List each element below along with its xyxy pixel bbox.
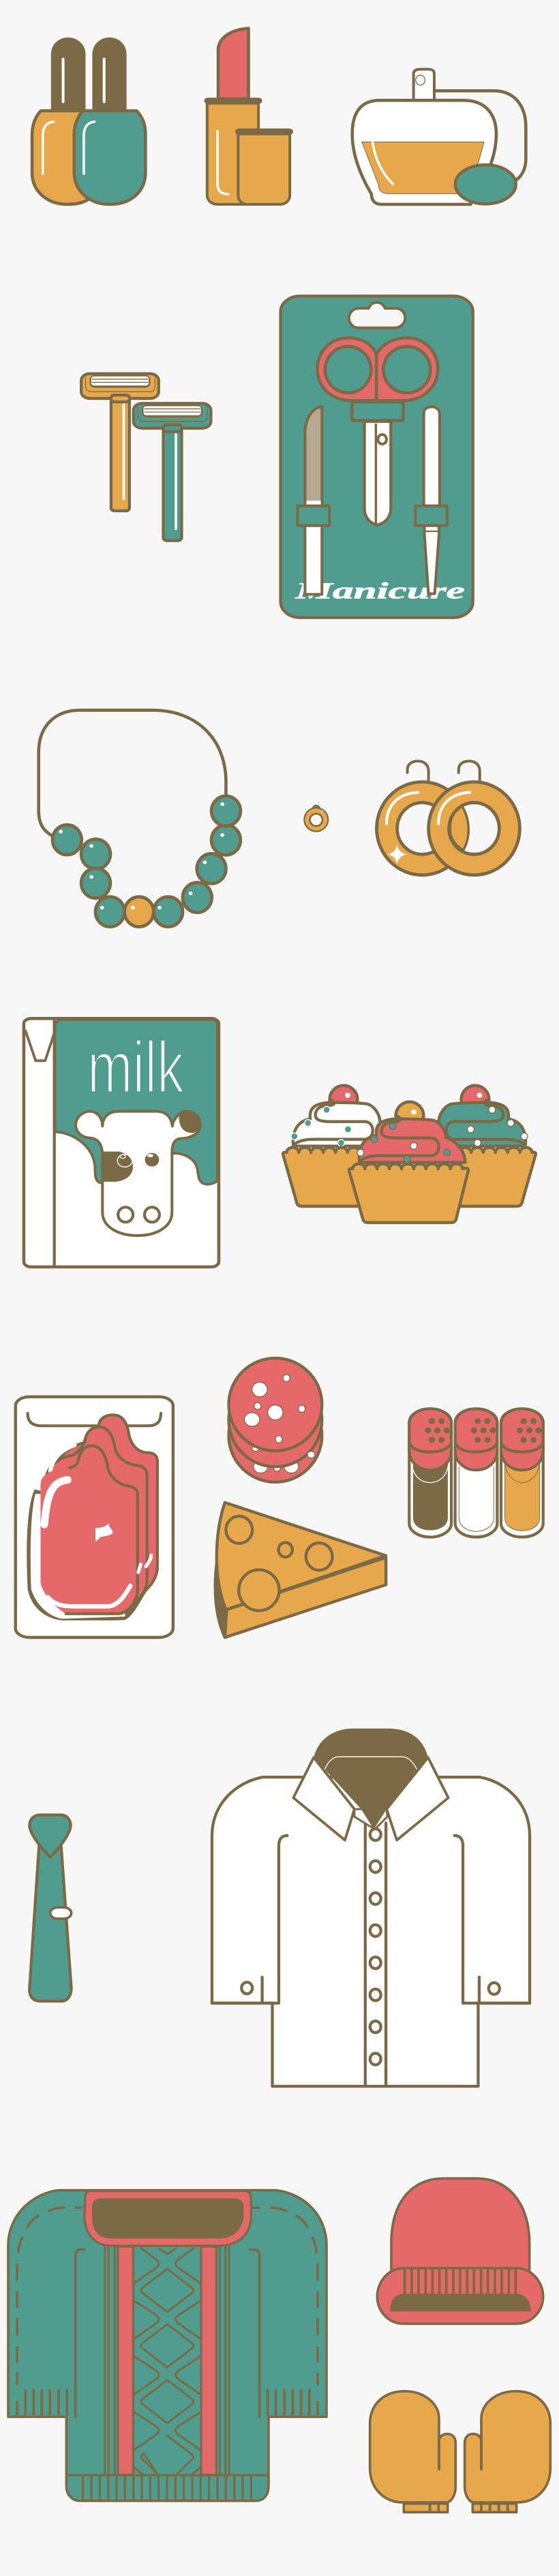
icon: scissors bbox=[318, 338, 438, 526]
icon: perfume bottle bbox=[352, 69, 526, 204]
icon: beanie hat bbox=[377, 2178, 543, 2324]
cow head bbox=[76, 1112, 200, 1236]
row: razors and manicure set bbox=[81, 296, 473, 618]
icon: nail file bbox=[298, 407, 329, 595]
icon: hoop earrings bbox=[377, 761, 519, 875]
icon: orange razor bbox=[81, 374, 159, 511]
icon: dress shirt bbox=[212, 1729, 530, 2086]
hanging hole bbox=[349, 302, 405, 328]
cupcake: white frosting bbox=[283, 1086, 402, 1206]
icon: salami slices bbox=[229, 1358, 322, 1482]
row: formal wear bbox=[29, 1729, 530, 2086]
icon: packaged meat bbox=[16, 1397, 173, 1637]
carton teal panel bbox=[55, 1020, 217, 1184]
icon: left mitten bbox=[370, 2391, 455, 2512]
icon: knitted cardigan bbox=[8, 2190, 327, 2501]
shaker: salt bbox=[455, 1409, 497, 1537]
row: winter accessories bbox=[370, 2178, 550, 2512]
shaker: pepper bbox=[409, 1409, 451, 1537]
panel: manicure card bbox=[281, 296, 473, 618]
row: cosmetics bbox=[32, 29, 526, 204]
shaker: turmeric bbox=[501, 1409, 543, 1537]
row: milk and cupcakes bbox=[24, 1018, 536, 1267]
cupcake: teal frosting bbox=[417, 1086, 536, 1206]
icon: lipstick bbox=[205, 29, 293, 204]
icon: nail polish bottles bbox=[32, 37, 145, 204]
icon: spice shakers bbox=[409, 1409, 543, 1537]
card brand text: Manicure bbox=[294, 578, 465, 603]
icon: cheese wedge bbox=[215, 1503, 386, 1637]
icon: necktie bbox=[29, 1815, 72, 2001]
icon: bead necklace bbox=[39, 710, 241, 927]
icon: right mitten bbox=[465, 2391, 550, 2512]
row: jewellery bbox=[39, 710, 519, 927]
icon: teal razor bbox=[134, 403, 211, 541]
carton label: milk: milk bbox=[87, 1026, 185, 1108]
icon: cupcakes bbox=[283, 1086, 536, 1223]
icon: ring bbox=[304, 805, 328, 832]
shirt collar bbox=[293, 1729, 449, 1840]
cupcake: red frosting bbox=[349, 1102, 468, 1223]
icon: cuticle tool bbox=[415, 407, 447, 594]
icon: milk carton bbox=[24, 1018, 219, 1267]
row: groceries bbox=[16, 1358, 543, 1637]
